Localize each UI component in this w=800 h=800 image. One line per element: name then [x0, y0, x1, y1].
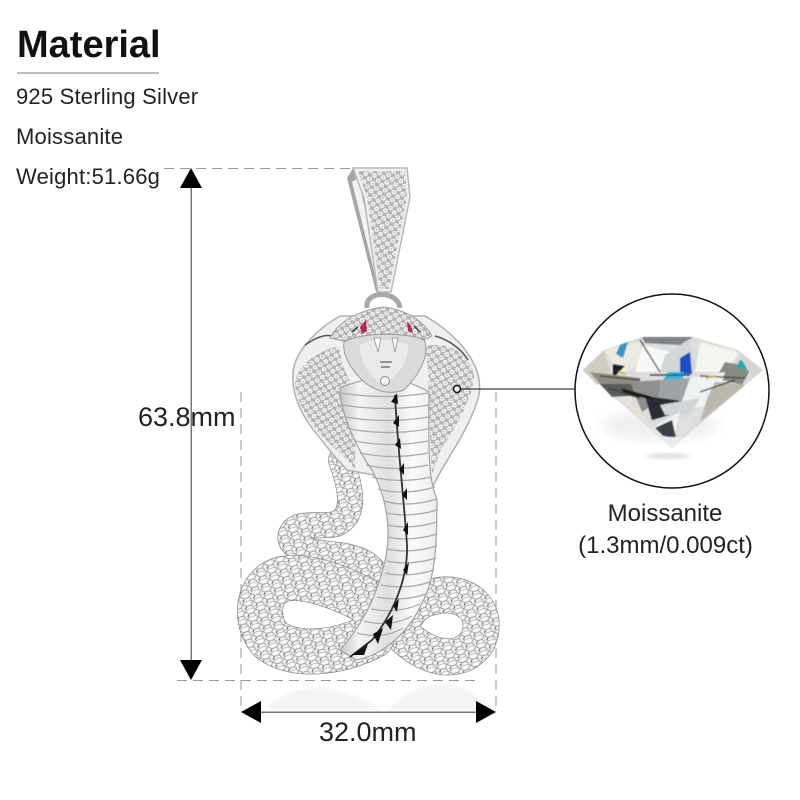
arrow: height dimension [180, 168, 202, 680]
width label: 32.0mm [319, 717, 417, 747]
moissanite label: Moissanite [608, 500, 722, 527]
moissanite circle [575, 294, 769, 488]
head [330, 307, 432, 392]
left coil [260, 578, 385, 651]
centre black notches [352, 393, 409, 655]
pointer line to moissanite [454, 386, 575, 392]
jump ring [367, 294, 400, 308]
pendant: cobra [260, 168, 481, 660]
belly ribs [341, 393, 437, 636]
upper tail [291, 460, 378, 582]
moissanite diamond [583, 337, 763, 459]
reflection of pendant [265, 684, 490, 710]
eyes [360, 320, 367, 334]
body [340, 379, 437, 660]
hood [293, 316, 480, 486]
moissanite label: (1.3mm/0.009ct) [578, 532, 753, 559]
dimension guides: dashed lines [164, 168, 496, 708]
hood inner dark rim [305, 335, 468, 360]
tongue [380, 376, 390, 386]
height label: 63.8mm [138, 402, 236, 432]
moissanite label [578, 500, 753, 559]
right hood pave [426, 345, 474, 476]
bail with pave stones [347, 168, 410, 292]
text: material list [16, 84, 198, 189]
text: material list: Moissanite [16, 124, 123, 149]
right coil [395, 595, 481, 657]
text: material list: 925 Sterling Silver [16, 84, 198, 109]
title underline [17, 72, 159, 74]
left hood pave [295, 346, 356, 470]
arrow: width dimension [241, 701, 496, 723]
text: material list: Weight:51.66g [16, 164, 160, 189]
belly centre line [350, 395, 407, 657]
title: Material [17, 24, 161, 66]
fangs [374, 338, 398, 352]
